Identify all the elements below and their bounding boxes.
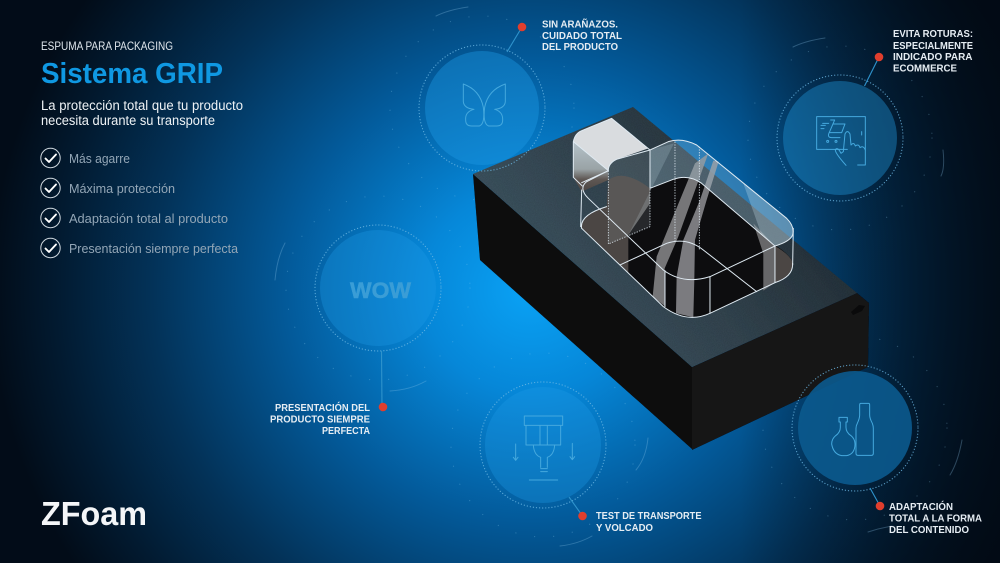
callout: adaptación: ADAPTACIÓN [889,500,953,513]
item 4 [41,238,239,258]
icon: bottles [832,403,873,456]
icon: butterfly [463,84,505,126]
subtitle [41,98,243,128]
callout: evita roturas: ECOMMERCE [893,62,957,74]
callout: presentación: PERFECTA [322,425,370,437]
title: Sistema GRIP [41,58,223,90]
callout: presentación: PRESENTACIÓN DEL [275,401,371,414]
callout: test: TEST DE TRANSPORTE [596,510,702,522]
floor edges [581,150,793,313]
brown floor right [775,246,793,283]
item 1 [41,148,130,168]
foam left face [473,174,692,449]
cavity floor [581,177,793,317]
logo: ZFoam: ZFoam [41,495,147,532]
grey light strips [653,153,708,306]
heading block [41,41,243,128]
decorative particle rings [275,7,962,546]
callout: evita roturas: ESPECIALMENTE [893,40,973,52]
item 3 [41,208,228,228]
eyebrow: ESPUMA PARA PACKAGING [41,41,173,53]
callout: adaptación: TOTAL A LA FORMA [889,512,982,524]
brown floor left [581,176,650,273]
callout: adaptación: DEL CONTENIDO [889,524,969,536]
callout: test: Y VOLCADO [596,522,653,534]
callout: test [569,497,702,534]
icon: cart on touch screen [817,117,865,165]
circle: adaptación [792,365,918,491]
circle: evita roturas [777,75,903,201]
callout: sin arañazos: SIN ARAÑAZOS. [542,18,618,30]
item 4: Presentación siempre perfecta [69,241,239,256]
tab wall [608,150,650,244]
foam right face [692,293,869,450]
item 1: Más agarre [69,151,130,166]
top rim [583,140,793,280]
bottom rim [582,228,793,317]
icon: drop test machine [513,416,575,480]
circle: test [480,382,606,508]
item 3: Adaptación total al producto [69,211,228,226]
callout: sin arañazos: CUIDADO TOTAL [542,30,623,42]
icon: wow word: WOW [350,278,411,303]
circle: wow [315,225,441,351]
transparent tray wireframe [573,118,793,317]
subtitle: La protección total que tu producto [41,98,243,113]
callout: evita roturas [864,28,973,86]
subtitle: necesita durante su transporte [41,113,215,128]
cap front face [573,142,608,192]
foam block [473,107,869,450]
callout: sin arañazos: DEL PRODUCTO [542,41,618,53]
callout: presentación [270,351,387,437]
item 2 [41,178,175,198]
checklist [41,148,239,258]
glass back wall [650,140,793,246]
callout: adaptación [870,488,982,536]
dotted edges [608,142,699,250]
callout: evita roturas: INDICADO PARA [893,51,973,63]
foam top face [473,107,857,367]
item 2: Máxima protección [69,181,175,196]
circle: sin arañazos [419,45,545,171]
callout: sin arañazos [507,18,623,53]
callout: presentación: PRODUCTO SIEMPRE [270,414,370,426]
callout: evita roturas: EVITA ROTURAS: [893,28,973,40]
cap top face [573,118,648,171]
